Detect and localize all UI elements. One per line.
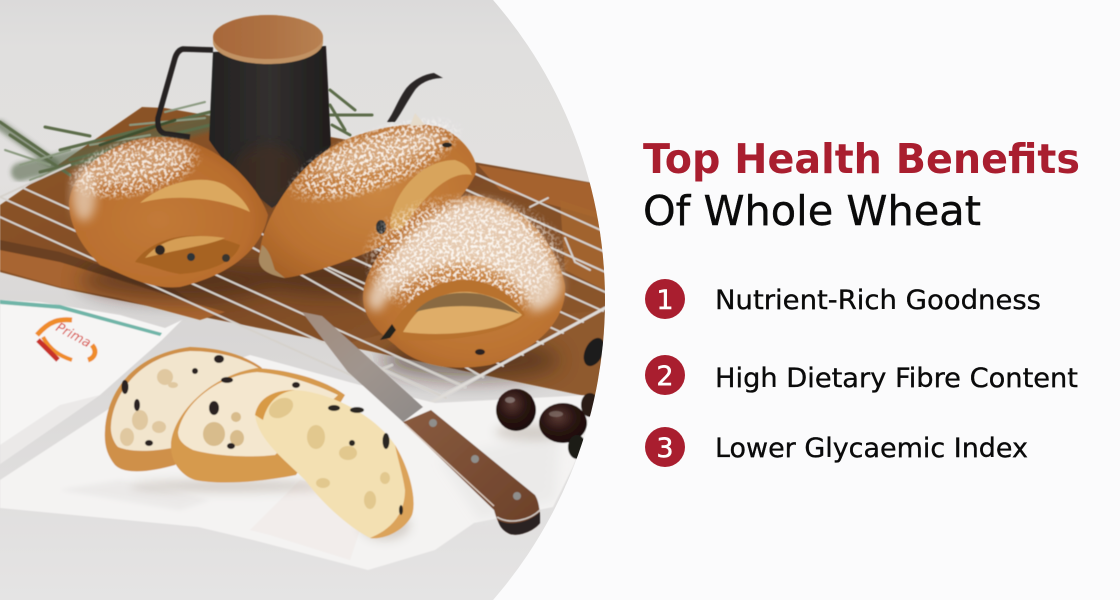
bread slice one xyxy=(105,347,262,471)
benefit 3: Lower Glycaemic Index xyxy=(715,433,1028,464)
title: Of Whole Wheat xyxy=(643,187,981,235)
benefit 3: 3 xyxy=(656,433,674,464)
title xyxy=(643,135,1080,235)
wire cooling rack xyxy=(0,163,605,398)
kettle handle xyxy=(158,49,213,137)
knife handle xyxy=(403,410,540,535)
parchment paper xyxy=(0,355,600,570)
bread knife xyxy=(302,312,540,535)
benefit 2: 2 xyxy=(656,361,674,392)
bread loaf right xyxy=(360,192,570,368)
brand logo xyxy=(37,320,95,360)
olives xyxy=(496,335,608,459)
rosemary sprigs xyxy=(0,90,372,180)
bread loaf left xyxy=(60,124,268,287)
benefit 1 xyxy=(645,279,1041,319)
benefit 1: 1 xyxy=(656,285,674,316)
photo: bread still life in curved frame xyxy=(0,0,605,600)
title: Top Health Benefits xyxy=(643,135,1080,183)
wrapping bag with logo xyxy=(0,300,182,464)
benefit 3 xyxy=(645,427,1028,467)
brand logo: Prima xyxy=(53,320,93,351)
benefit 2: High Dietary Fibre Content xyxy=(715,363,1078,394)
knife blade xyxy=(302,312,423,422)
bread slice three xyxy=(255,390,414,538)
soft shadow under the bread xyxy=(80,255,560,380)
bread loaf centre xyxy=(259,97,476,278)
table and wall surface xyxy=(0,0,620,600)
kettle body xyxy=(209,46,331,208)
benefit 2 xyxy=(645,355,1078,395)
shadow under slices xyxy=(130,424,565,540)
kettle spout xyxy=(387,73,443,122)
panel: text content xyxy=(643,135,1080,467)
wooden lid xyxy=(213,15,323,64)
kettle xyxy=(158,15,443,208)
bread slice two xyxy=(171,368,345,482)
wooden cutting board xyxy=(0,107,610,397)
benefit 1: Nutrient-Rich Goodness xyxy=(715,285,1041,316)
